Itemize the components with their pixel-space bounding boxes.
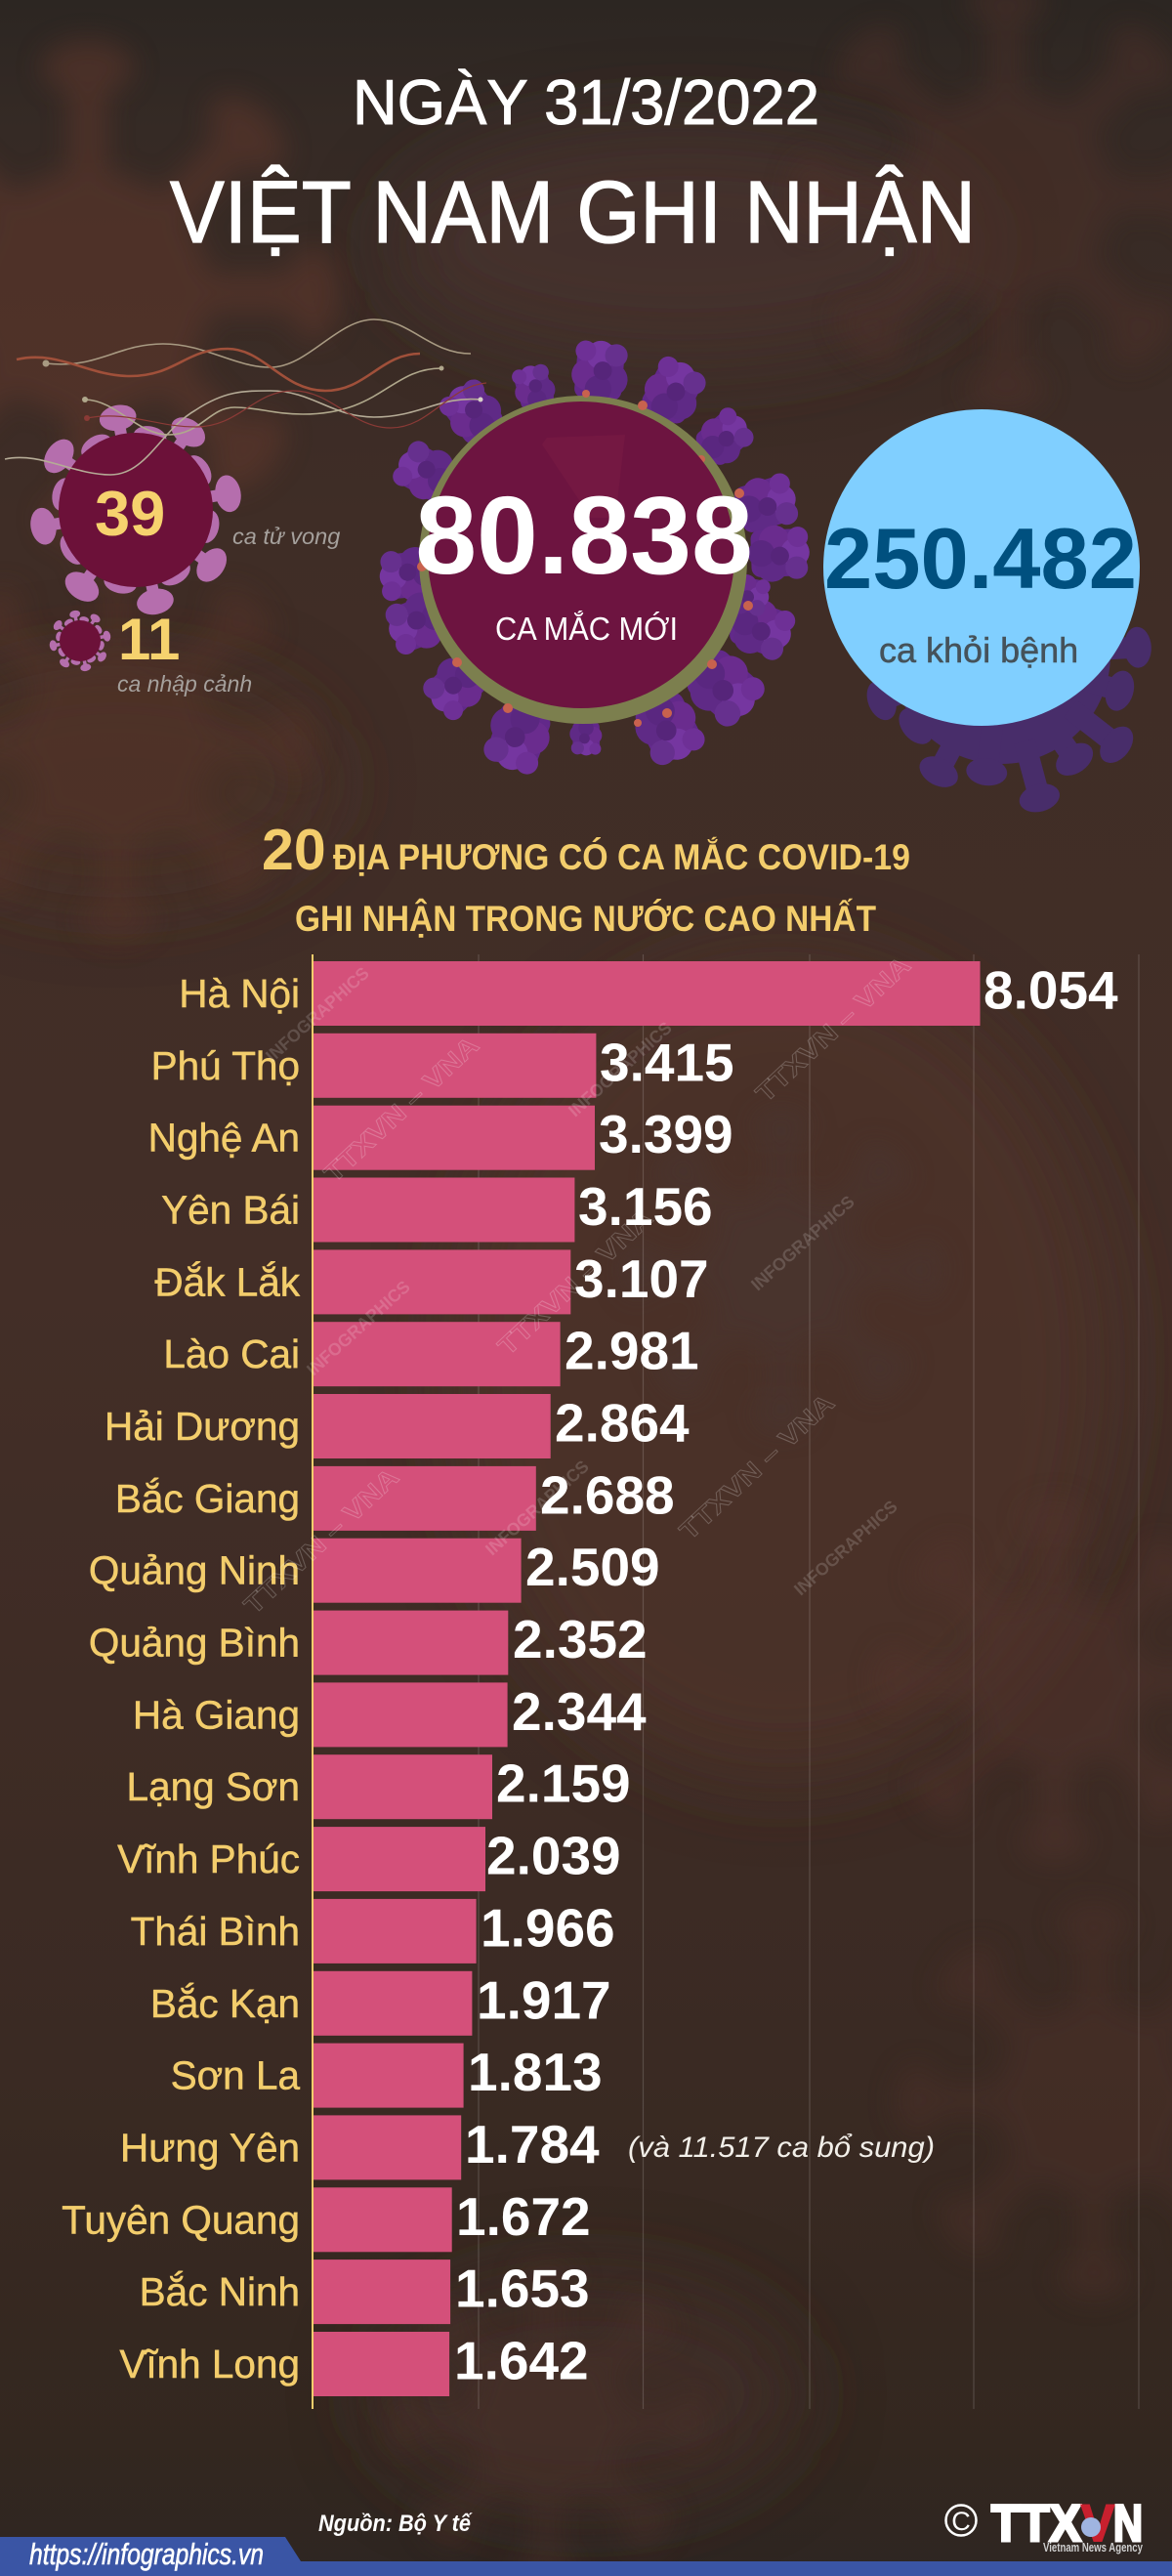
row: Lạng Sơn: Lạng Sơn (127, 1764, 300, 1809)
row: Đắk Lắk: Đắk Lắk (154, 1259, 301, 1304)
row: Tuyên Quang (62, 2186, 591, 2252)
row: Hưng Yên: Hưng Yên (120, 2125, 300, 2170)
row: Bắc Ninh (140, 2259, 590, 2324)
number: recovered: 250.482 (824, 510, 1137, 607)
row: Quảng Bình: Quảng Bình (89, 1621, 300, 1666)
row: Lạng Sơn (127, 1753, 631, 1819)
watermarks: INFOGRAPHICS (481, 1457, 593, 1559)
row: Tuyên Quang: 1.672 (456, 2186, 591, 2247)
row: Đắk Lắk (154, 1248, 709, 1314)
watermarks: INFOGRAPHICS (303, 1277, 414, 1379)
chart heading line 1 (262, 818, 910, 882)
label: new cases: CA MẮC MỚI (495, 611, 678, 647)
row: Quảng Ninh: Quảng Ninh (89, 1548, 300, 1593)
footer bar (0, 2537, 1172, 2576)
title: main heading: VIỆT NAM GHI NHẬN (170, 164, 976, 262)
row: Hải Dương (105, 1393, 690, 1458)
source: Nguồn: Bộ Y tế (318, 2511, 473, 2537)
row: Vĩnh Long: Vĩnh Long (119, 2342, 300, 2386)
watermarks (238, 950, 916, 1620)
row: Phú Thọ: 3.415 (600, 1032, 734, 1092)
row: Hưng Yên (120, 2114, 600, 2179)
chart heading line 1: ĐỊA PHƯƠNG CÓ CA MẮC COVID-19 (333, 836, 910, 877)
watermarks: TTXVN – VNA (750, 950, 916, 1108)
watermarks: INFOGRAPHICS (747, 1192, 858, 1294)
number: new cases: 80.838 (415, 474, 753, 597)
row: Sơn La: Sơn La (171, 2053, 300, 2098)
row: Sơn La (171, 2042, 603, 2108)
row: Quảng Bình (89, 1609, 648, 1675)
row: Vĩnh Phúc: Vĩnh Phúc (117, 1837, 300, 1881)
title: date: NGÀY 31/3/2022 (353, 66, 819, 138)
note: additional cases: (và 11.517 ca bổ sung) (628, 2132, 935, 2164)
chart heading line 2: GHI NHẬN TRONG NƯỚC CAO NHẤT (295, 898, 876, 939)
row: Bắc Kạn: 1.917 (477, 1969, 611, 2030)
row: Nghệ An: 3.399 (599, 1104, 733, 1164)
row: Phú Thọ: Phú Thọ (151, 1043, 300, 1088)
watermarks: TTXVN – VNA (674, 1387, 840, 1545)
label: imported cases: ca nhập cảnh (117, 671, 252, 697)
row: Quảng Ninh (89, 1537, 660, 1603)
row: Hải Dương: 2.864 (555, 1393, 690, 1454)
watermarks: INFOGRAPHICS (262, 963, 373, 1066)
circle: recovered (823, 409, 1140, 726)
row: Tuyên Quang: Tuyên Quang (62, 2197, 300, 2242)
number: imported cases: 11 (118, 607, 180, 672)
row: Hà Nội: Hà Nội (179, 971, 300, 1016)
row: Lào Cai: Lào Cai (163, 1331, 300, 1376)
icon: imported cases virus (49, 610, 111, 672)
row: Nghệ An (148, 1104, 733, 1170)
watermarks: TTXVN – VNA (492, 1203, 658, 1361)
row: Vĩnh Phúc (117, 1826, 621, 1891)
row: Vĩnh Phúc: 2.039 (486, 1826, 621, 1886)
row: Thái Bình: Thái Bình (131, 1909, 300, 1954)
row: Quảng Ninh: 2.509 (525, 1537, 660, 1597)
decorative flowing lines (5, 319, 486, 475)
row: Bắc Giang: 2.688 (540, 1464, 675, 1525)
row: Lào Cai: 2.981 (565, 1321, 699, 1381)
row: Hà Nội (179, 959, 1118, 1026)
logo: TTXVN (945, 2495, 1143, 2555)
row: Hải Dương: Hải Dương (105, 1404, 300, 1449)
row: Vĩnh Long (119, 2331, 589, 2396)
row: Đắk Lắk: 3.107 (574, 1248, 709, 1309)
logo: TTXVN: Vietnam News Agency (1043, 2541, 1143, 2555)
label: recovered: ca khỏi bệnh (879, 630, 1078, 670)
row: Bắc Kạn: Bắc Kạn (150, 1981, 300, 2026)
row: Bắc Ninh: 1.653 (455, 2259, 590, 2319)
row: Yên Bái (161, 1176, 713, 1243)
row: Hưng Yên: 1.784 (465, 2114, 600, 2175)
row: Bắc Kạn (150, 1969, 611, 2036)
watermarks: TTXVN – VNA (318, 1030, 484, 1188)
logo: TTXVN: N (1113, 2495, 1143, 2553)
row: Yên Bái: Yên Bái (161, 1188, 300, 1233)
row: Bắc Ninh: Bắc Ninh (140, 2269, 300, 2314)
bar chart (62, 954, 1139, 2409)
watermarks: INFOGRAPHICS (565, 1018, 676, 1120)
row: Hà Giang: Hà Giang (133, 1692, 300, 1737)
watermarks: TTXVN – VNA (238, 1461, 404, 1620)
row: Hà Nội: 8.054 (984, 959, 1118, 1020)
row: Phú Thọ (151, 1032, 734, 1098)
icon: purple virus behind recovered circle (861, 545, 1152, 817)
icon: main virus with new cases (377, 338, 811, 780)
row: Thái Bình (131, 1897, 615, 1964)
logo: TTXVN: V (1081, 2495, 1114, 2553)
watermarks: INFOGRAPHICS (790, 1497, 901, 1599)
row: Hà Giang: 2.344 (512, 1681, 647, 1742)
row: Hà Giang (133, 1681, 647, 1747)
footer url: https://infographics.vn (29, 2537, 264, 2571)
row: Yên Bái: 3.156 (578, 1176, 713, 1237)
row: Lào Cai (163, 1321, 699, 1386)
logo: TTXVN: C (951, 2507, 971, 2536)
row: Bắc Giang: Bắc Giang (115, 1476, 300, 1521)
row: Vĩnh Long: 1.642 (454, 2331, 589, 2391)
row: Bắc Giang (115, 1464, 675, 1531)
label: deaths: ca tử vong (232, 524, 340, 549)
icon: deaths virus with count (27, 401, 244, 618)
row: Nghệ An: Nghệ An (148, 1116, 300, 1161)
row: Quảng Bình: 2.352 (513, 1609, 648, 1669)
row: Sơn La: 1.813 (468, 2042, 603, 2102)
row: Thái Bình: 1.966 (481, 1897, 615, 1958)
logo: TTXVN: TTX (991, 2495, 1081, 2553)
icon: deaths virus with count: 39 (95, 478, 165, 549)
row: Lạng Sơn: 2.159 (496, 1753, 631, 1814)
chart heading line 1: 20 (262, 818, 326, 882)
